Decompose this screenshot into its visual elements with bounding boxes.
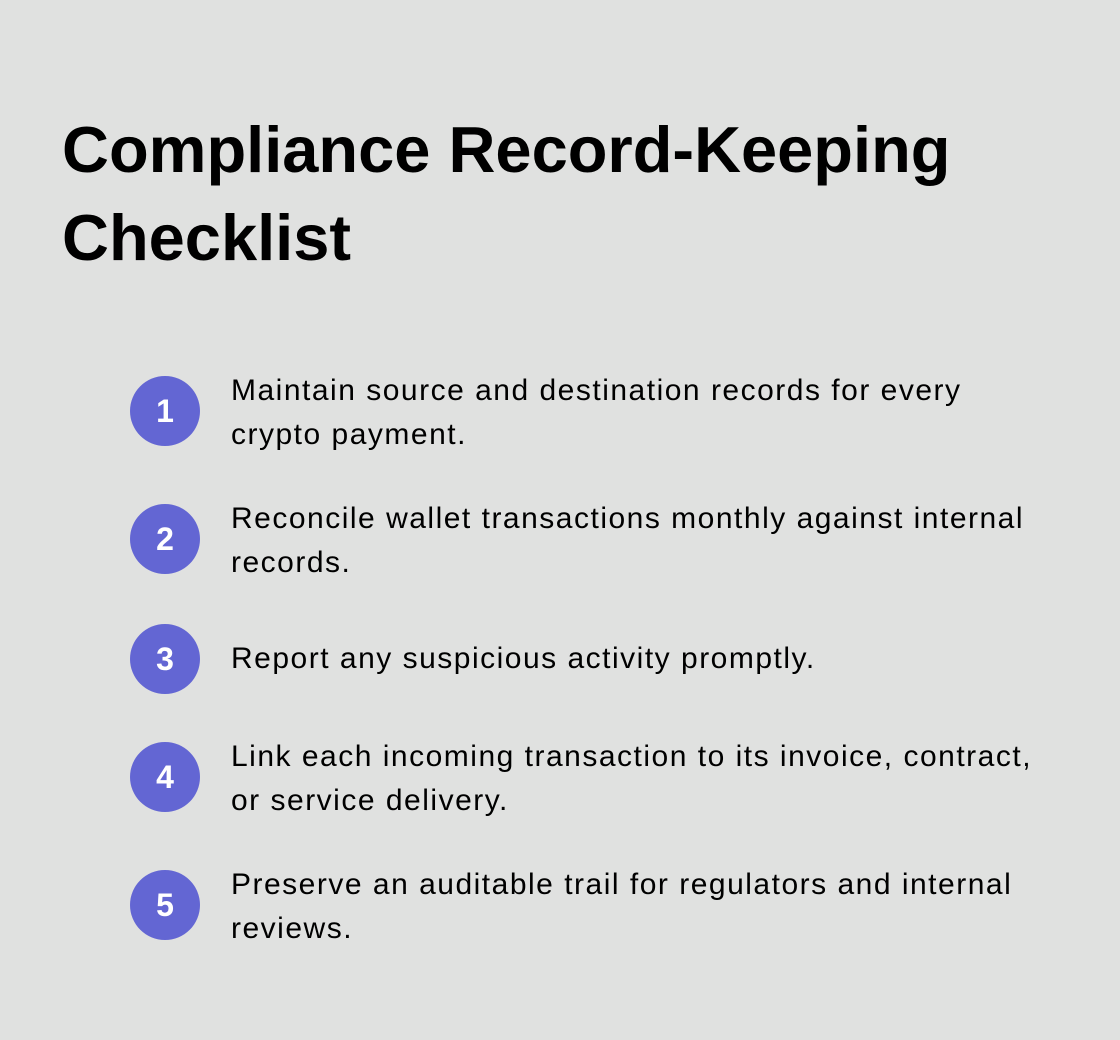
badge 5 bbox=[130, 870, 200, 940]
badge 1: 1 bbox=[156, 393, 174, 429]
badge 2: 2 bbox=[156, 521, 174, 557]
item 4 bbox=[130, 740, 1032, 817]
text 5: reviews. bbox=[231, 912, 353, 945]
item 2 bbox=[130, 502, 1024, 579]
badge 4 bbox=[130, 742, 200, 812]
badge 4: 4 bbox=[156, 759, 174, 795]
badge 2 bbox=[130, 504, 200, 574]
text 1: crypto payment. bbox=[231, 418, 467, 451]
text 1: Maintain source and destination records for every bbox=[231, 374, 962, 407]
text 5: Preserve an auditable trail for regulators and internal bbox=[231, 868, 1012, 901]
title: Checklist bbox=[62, 201, 351, 274]
title bbox=[62, 113, 950, 274]
text 1 bbox=[231, 374, 962, 451]
text 2: records. bbox=[231, 546, 351, 579]
item 1 bbox=[130, 374, 962, 451]
text 2: Reconcile wallet transactions monthly against internal bbox=[231, 502, 1024, 535]
text 3: Report any suspicious activity promptly. bbox=[231, 642, 816, 675]
title: Compliance Record-Keeping bbox=[62, 113, 950, 186]
item 3 bbox=[130, 624, 816, 694]
text 2 bbox=[231, 502, 1024, 579]
text 4: or service delivery. bbox=[231, 784, 509, 817]
badge 1 bbox=[130, 376, 200, 446]
text 4: Link each incoming transaction to its invoice, contract, bbox=[231, 740, 1032, 773]
badge 3: 3 bbox=[156, 641, 174, 677]
badge 3 bbox=[130, 624, 200, 694]
item 5 bbox=[130, 868, 1012, 945]
text 5 bbox=[231, 868, 1012, 945]
text 4 bbox=[231, 740, 1032, 817]
badge 5: 5 bbox=[156, 887, 174, 923]
